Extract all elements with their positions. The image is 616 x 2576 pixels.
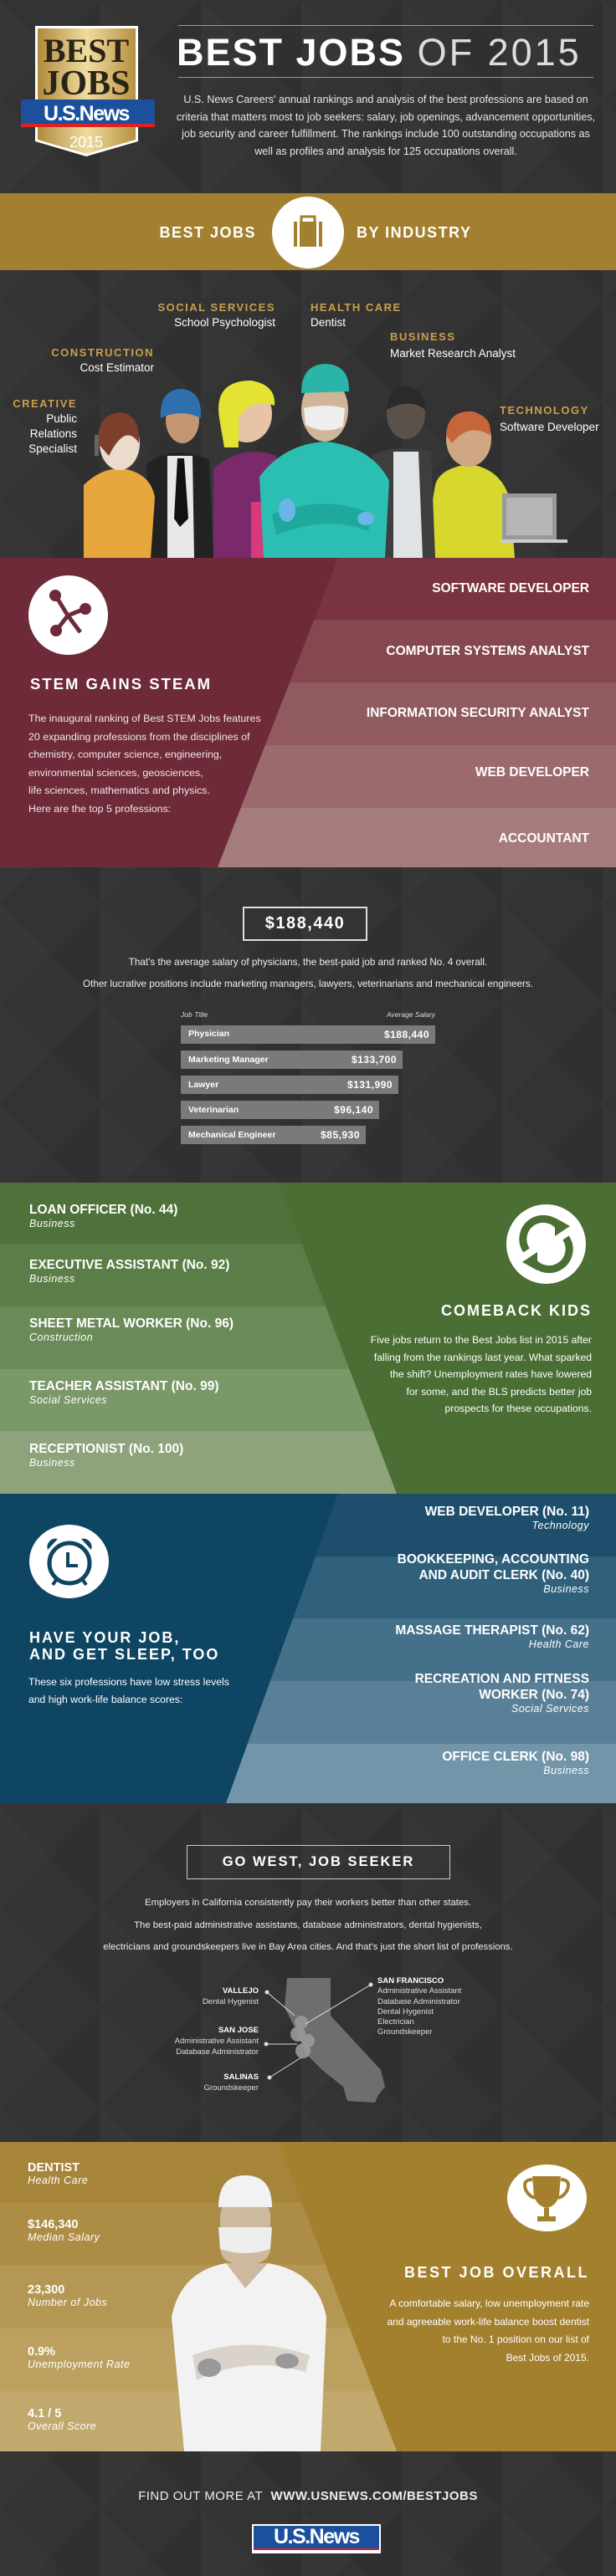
bar chart: salaries: $96,140 [334,1104,373,1116]
text [28,1676,229,1705]
panel: have your job, get sleep [0,1494,616,1803]
text: SAN FRANCISCO [377,1976,444,1986]
heading: go west [187,1845,450,1879]
list: comeback jobs: RECEPTIONIST (No. 100) [29,1442,183,1456]
label: creative [13,397,77,455]
text: falling from the rankings last year. What sparked [374,1352,592,1363]
bar chart: salaries: Veterinarian [188,1105,239,1115]
intro text: well as profiles and analysis for 125 occupations overall. [254,146,517,157]
bar chart: salaries: Mechanical Engineer [188,1130,275,1140]
text [371,1334,592,1414]
salary callout [243,907,367,941]
band: best jobs by industry [0,193,616,270]
dentist stats [28,2161,130,2432]
footer logo: U.S.News [274,2525,359,2548]
list: comeback jobs: TEACHER ASSISTANT (No. 99) [29,1379,218,1393]
dentist stats: Median Salary [28,2231,100,2243]
salary text [83,957,533,989]
salary callout: $188,440 [265,914,345,933]
bar chart: salaries: $131,990 [347,1079,393,1091]
text: environmental sciences, geosciences, [28,767,203,779]
intro text: criteria that matters most to job seekers: salary, job openings, advancement opportunities, [177,111,595,123]
text: Database Administrator [176,2047,259,2057]
icon: alarm clock [29,1525,109,1598]
text: Best Jobs of 2015. [506,2352,589,2364]
label: construction: CONSTRUCTION [51,346,154,359]
bar chart: salaries: Marketing Manager [188,1055,269,1065]
text: Administrative Assistant [175,2037,259,2046]
list: top 5: INFORMATION SECURITY ANALYST [367,706,589,720]
text: and high work-life balance scores: [28,1694,182,1705]
label: social services [157,301,275,329]
title: BEST JOBS OF 2015 [177,31,582,74]
text: The inaugural ranking of Best STEM Jobs features [28,713,261,724]
text [28,713,261,815]
text: Groundskeeper [377,2027,432,2037]
text: prospects for these occupations. [445,1403,592,1414]
list: top 5: COMPUTER SYSTEMS ANALYST [386,644,589,658]
text [387,2297,589,2364]
label: health care: HEALTH CARE [311,301,402,314]
list: low-stress jobs: Social Services [511,1703,589,1715]
icon: trophy [507,2165,587,2231]
panel: best job overall [0,2142,616,2451]
list: low-stress jobs: AND AUDIT CLERK (No. 40) [418,1568,589,1582]
dentist stats: Unemployment Rate [28,2359,130,2370]
text: and agreeable work-life balance boost dentist [387,2316,589,2328]
footer logo [252,2524,381,2553]
text: for some, and the BLS predicts better job [406,1385,592,1397]
label: business [390,330,516,360]
list: comeback jobs: SHEET METAL WORKER (No. 96) [29,1316,234,1331]
list: low-stress jobs: Business [543,1765,589,1776]
label: creative: Specialist [28,442,77,455]
text: life sciences, mathematics and physics. [28,785,210,796]
label: construction [51,346,154,374]
go west text: Employers in California consistently pay their workers better than other states. [145,1898,471,1908]
bar chart: salaries: Lawyer [188,1080,218,1090]
label: social services: SOCIAL SERVICES [157,301,275,314]
icon: briefcase [272,197,344,268]
text: SAN JOSE [218,2026,259,2035]
bar chart: salaries: Job Title [181,1010,208,1019]
heading: BEST JOB OVERALL [404,2264,589,2281]
dentist stats: $146,340 [28,2218,78,2231]
list: low-stress jobs: MASSAGE THERAPIST (No. 62) [395,1623,589,1638]
heading: STEM GAINS STEAM [30,675,212,693]
text: Five jobs return to the Best Jobs list in 2015 after [371,1334,592,1346]
text: 20 expanding professions from the disciplines of [28,731,249,743]
salary text: That's the average salary of physicians, the best-paid job and ranked No. 4 overall. [129,957,487,968]
panel: comeback kids [0,1183,616,1494]
list: low-stress jobs: BOOKKEEPING, ACCOUNTING [398,1552,589,1567]
text: the shift? Unemployment rates have lowered [390,1368,592,1380]
bar chart: salaries: $85,930 [321,1129,360,1141]
header badge: JOBS [42,64,131,103]
bar chart: salaries: $188,440 [384,1029,429,1040]
header badge: BEST [44,32,129,69]
footer text: FIND OUT MORE AT WWW.USNEWS.COM/BESTJOBS [138,2489,478,2503]
band: best jobs by industry: BEST JOBS [159,224,256,241]
map labels: VALLEJO [223,1986,259,1996]
panel: stem gains steam [0,558,616,867]
icon: refresh [506,1204,586,1284]
bar chart: salaries: Average Salary [387,1010,435,1019]
text: to the No. 1 position on our list of [443,2333,589,2345]
list: low-stress jobs: Health Care [529,1638,589,1650]
intro text: U.S. News Careers' annual rankings and analysis of the best professions are based on [183,94,588,105]
heading: COMEBACK KIDS [441,1302,592,1319]
text: Administrative Assistant [377,1986,461,1996]
list: comeback jobs [29,1203,234,1469]
intro text [177,94,595,157]
list: comeback jobs: Business [29,1273,75,1285]
intro text: job security and career fulfillment. The rankings include 100 outstanding occupations as [182,128,590,140]
dentist stats: 4.1 / 5 [28,2407,61,2420]
label: social services: School Psychologist [174,316,275,329]
list: comeback jobs: EXECUTIVE ASSISTANT (No. 92) [29,1258,229,1272]
dentist stats: Health Care [28,2175,88,2186]
text: Dental Hygenist [377,2007,434,2016]
go west text: electricians and groundskeepers live in Bay Area cities. And that's just the short list of professions. [103,1942,513,1952]
heading: AND GET SLEEP, TOO [29,1646,219,1663]
label: health care [311,301,402,329]
text: A comfortable salary, low unemployment rate [389,2297,589,2309]
band: best jobs by industry: BY INDUSTRY [357,224,472,241]
text: SALINAS [223,2073,259,2082]
header badge: U.S.News [44,102,130,125]
list: top 5: SOFTWARE DEVELOPER [432,581,589,595]
people illustration [84,364,567,558]
label: creative: Relations [30,427,77,440]
go west text: The best-paid administrative assistants, database administrators, dental hygienists, [134,1920,482,1930]
label: construction: Cost Estimator [80,361,154,374]
list: comeback jobs: Construction [29,1331,93,1343]
label: creative: CREATIVE [13,397,77,410]
list: low-stress jobs: WEB DEVELOPER (No. 11) [425,1505,589,1519]
go west text [103,1898,513,1952]
text: Electrician [377,2017,414,2027]
dentist stats: Overall Score [28,2420,96,2432]
dentist stats: 0.9% [28,2345,55,2359]
heading: HAVE YOUR JOB, [29,1629,180,1646]
dentist figure [172,2175,326,2451]
list: low-stress jobs: OFFICE CLERK (No. 98) [442,1750,589,1764]
label: technology: Software Developer [500,421,599,433]
label: business: BUSINESS [390,330,455,343]
label: business: Market Research Analyst [390,347,516,360]
map labels [203,1986,259,2006]
text: Groundskeeper [204,2083,259,2093]
list: low-stress jobs [395,1505,589,1776]
dentist stats: Number of Jobs [28,2297,107,2308]
map: california [264,1978,385,2103]
label: creative: Public [46,412,77,425]
bar chart: salaries [181,1010,435,1144]
list: comeback jobs: Business [29,1218,75,1229]
list: comeback jobs: Social Services [29,1394,107,1406]
list: comeback jobs: LOAN OFFICER (No. 44) [29,1203,177,1217]
label: technology: TECHNOLOGY [500,404,589,417]
label: technology [500,404,599,433]
header badge: 2015 [69,134,103,151]
list: top 5: WEB DEVELOPER [475,765,589,779]
header badge [21,26,155,156]
text: Here are the top 5 professions: [28,803,171,815]
dentist stats: DENTIST [28,2161,80,2175]
text: Database Administrator [377,1997,460,2006]
list: low-stress jobs: RECREATION AND FITNESS [415,1672,589,1686]
bar chart: salaries: Physician [188,1029,229,1039]
text: These six professions have low stress levels [28,1676,229,1688]
list: comeback jobs: Business [29,1457,75,1469]
dentist stats: 23,300 [28,2283,64,2297]
list: top 5 [367,581,589,846]
list: low-stress jobs: WORKER (No. 74) [479,1688,589,1702]
heading: go west: GO WEST, JOB SEEKER [223,1854,414,1869]
list: top 5: ACCOUNTANT [499,831,589,846]
salary text: Other lucrative positions include marketing managers, lawyers, veterinarians and mechanical engineers. [83,979,533,989]
text: chemistry, computer science, engineering, [28,749,222,760]
heading [29,1629,219,1663]
list: low-stress jobs: Business [543,1583,589,1595]
map labels: Dental Hygenist [203,1997,259,2006]
label: health care: Dentist [311,316,346,329]
bar chart: salaries: $133,700 [352,1054,397,1066]
list: low-stress jobs: Technology [532,1520,589,1531]
icon: molecule [28,575,108,655]
